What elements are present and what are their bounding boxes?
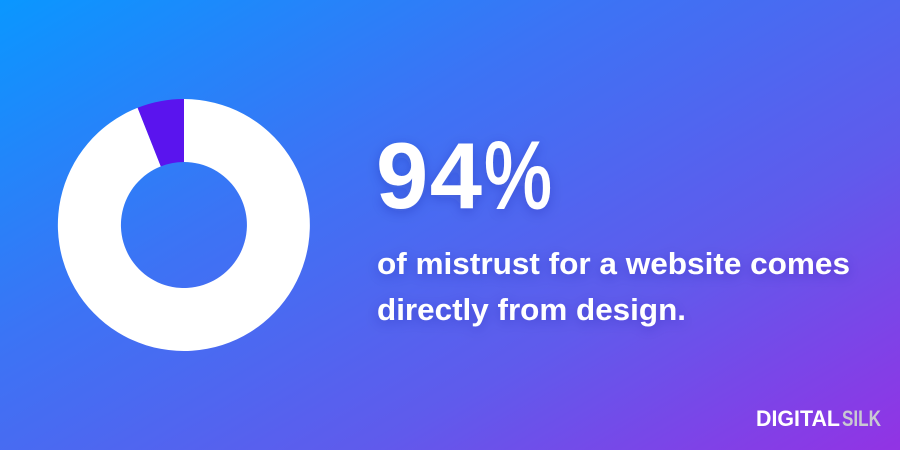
logo: Digital Silk: SILK	[842, 406, 881, 431]
description text	[377, 246, 850, 327]
big statistic: %	[484, 123, 552, 229]
donut segment: 6% purple	[138, 99, 184, 166]
logo: Digital Silk	[756, 406, 881, 431]
big statistic	[376, 123, 552, 229]
donut segment: 94% white	[58, 99, 310, 351]
donut chart: 94 percent	[58, 99, 310, 351]
big statistic: 94	[376, 123, 482, 228]
logo: Digital Silk: DIGITAL	[756, 406, 840, 431]
description text: directly from design.	[377, 292, 686, 327]
description text: of mistrust for a website comes	[377, 246, 850, 281]
